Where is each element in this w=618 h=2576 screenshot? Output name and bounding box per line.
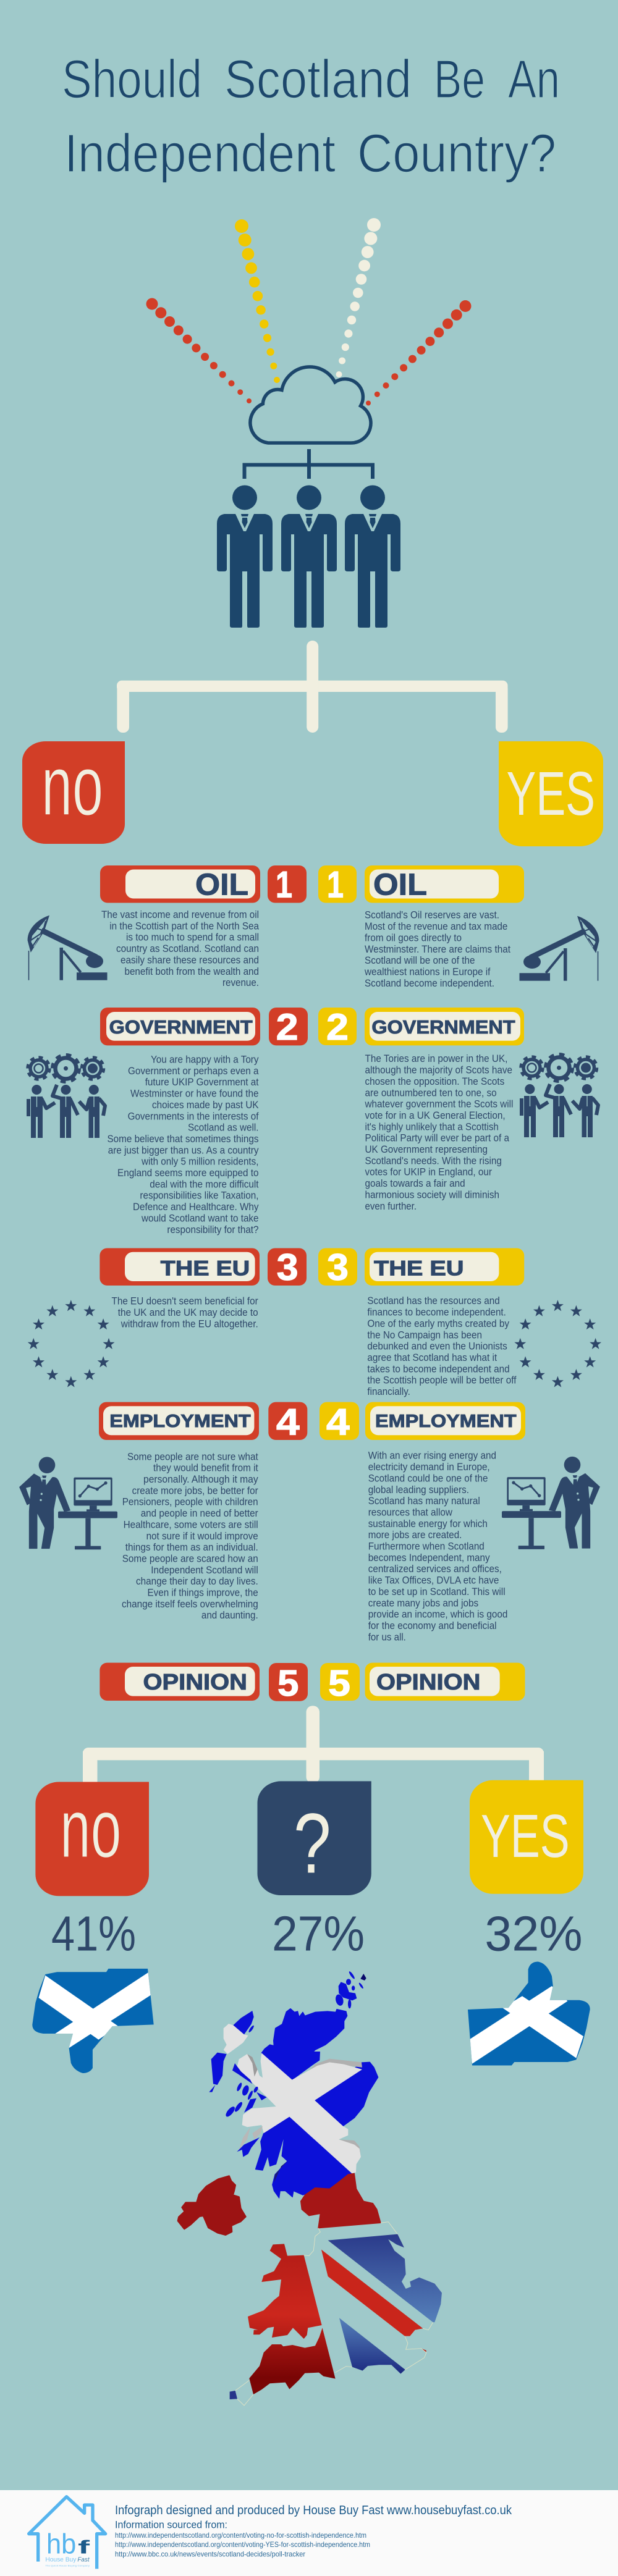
section 2 heading: government, yes side: GOVERNMENT [371, 1016, 515, 1038]
title: Country? [357, 124, 556, 183]
icon: people and gears right [520, 1054, 598, 1137]
text: EU, yes side: One of the early myths created by [367, 1318, 509, 1329]
text: employment, yes side: to be set up in Scotland. This will [368, 1586, 506, 1597]
panel: no [22, 738, 125, 844]
text: oil, yes side: wealthiest nations in Europe if [364, 966, 491, 977]
text: oil, no side: revenue. [222, 977, 259, 988]
text: employment, yes side: create many jobs and jobs [368, 1597, 478, 1609]
map: Scotland with saltire [209, 1971, 378, 2198]
section 5 heading: opinion, no side [99, 1663, 260, 1701]
text: government, no side: Westminster or have found the [130, 1088, 258, 1100]
number 1 yellow [318, 864, 357, 906]
panel: yes [499, 741, 603, 846]
icon: thumb down with Scottish flag [31, 1968, 154, 2074]
text: employment, no side: and daunting. [201, 1609, 258, 1621]
number 5 yellow: 5 [328, 1663, 350, 1704]
section 4 heading: employment, no side: EMPLOYMENT [109, 1412, 251, 1431]
section 5 heading: opinion, yes side: OPINION [376, 1669, 480, 1694]
text: oil, yes side: Scotland's Oil reserves are vast. [365, 909, 499, 921]
dotted rays: red left [146, 298, 252, 403]
panel: opinion yes [470, 1780, 583, 1894]
text: employment, no side: change itself feels overwhelming [122, 1598, 258, 1610]
text: government, no side: Some believe that sometimes things [108, 1133, 258, 1145]
footer sources heading: Information sourced from: [115, 2519, 227, 2531]
text: employment, yes side: more jobs are created. [368, 1529, 462, 1541]
footer credit: Infograph designed and produced by House Buy Fast www.housebuyfast.co.uk [115, 2504, 512, 2517]
text: oil, no side: country as Scotland. Scotland can [116, 943, 259, 954]
number 3 red [268, 1247, 307, 1288]
icon: people and gears left [27, 1055, 105, 1138]
text: government, no side: You are happy with a Tory [151, 1054, 259, 1065]
text: EU, yes side: Scotland has the resources and [367, 1295, 500, 1307]
footer source links: http://www.independentscotland.org/content/voting-no-for-scottish-independence.htm [115, 2531, 366, 2540]
text: oil, yes side: from oil goes directly to [365, 932, 462, 943]
panel: opinion no [35, 1782, 149, 1896]
section 1 heading: oil, yes side: OIL [373, 869, 427, 902]
icon: man at desk left [20, 1457, 117, 1549]
text: EU, no side [111, 1295, 258, 1329]
number 2 yellow: 2 [326, 1006, 349, 1048]
number 1 yellow: 1 [327, 864, 344, 906]
text: EU, yes side: the No Campaign has been [367, 1329, 482, 1341]
text: employment, yes side: like Tax Offices, DVLA etc have [368, 1575, 499, 1586]
text: employment, no side: not sure if it would improve [146, 1530, 258, 1542]
text: government, yes side: harmonious society will diminish [365, 1189, 499, 1200]
text: government, yes side: chosen the opposition. The Scots [365, 1075, 504, 1087]
section 3 heading: the EU, yes side [365, 1248, 524, 1286]
logo: House Buy Fast: House Buy [45, 2557, 76, 2564]
text: government, yes side: Political Party will ever be part of a [365, 1132, 509, 1144]
title: Should [62, 49, 202, 109]
text: employment, yes side [368, 1450, 507, 1643]
text: oil, no side: benefit both from the wealth and [125, 966, 259, 977]
logo: House Buy Fast: hb [46, 2528, 76, 2559]
percentage: no 41%: 41% [51, 1906, 136, 1961]
text: oil, no side [101, 909, 259, 988]
text: government, yes side: UK Government representing [365, 1143, 488, 1155]
text: employment, yes side: global leading suppliers. [368, 1484, 469, 1496]
number 4 yellow: 4 [326, 1401, 350, 1442]
number 2 red: 2 [276, 1006, 298, 1048]
text: employment, yes side: sustainable energy for which [368, 1518, 488, 1530]
section 2 heading: government, no side: GOVERNMENT [109, 1016, 253, 1038]
section 2 heading: government, yes side [365, 1008, 524, 1045]
dotted rays: cream [336, 218, 381, 377]
section 4 heading: employment, yes side [365, 1402, 525, 1440]
number 3 yellow [318, 1247, 357, 1288]
title [62, 49, 560, 183]
text: employment, yes side: With an ever rising energy and [368, 1450, 496, 1462]
number 4 red: 4 [276, 1401, 300, 1442]
text: employment, yes side: for us all. [368, 1631, 406, 1643]
text: EU, yes side: debunked and even the Unionists [367, 1341, 507, 1352]
title: Be [434, 49, 485, 109]
text: government, no side: Defence and Healthcare. Why [133, 1201, 259, 1213]
text: employment, no side: personally. Although it may [143, 1473, 258, 1485]
text: government, yes side: although the majority of Scots have [365, 1064, 512, 1076]
section 3 heading: the EU, no side: THE EU [161, 1256, 250, 1280]
section 1 heading: oil, no side: OIL [195, 869, 248, 902]
text: oil, no side: The vast income and revenue from oil [101, 909, 259, 920]
text: EU, no side: The EU doesn't seem beneficial for [111, 1295, 258, 1307]
text: government, yes side: Scotland's needs. With the rising [365, 1155, 502, 1166]
panel: no: no [41, 738, 103, 833]
footer panel [0, 2490, 618, 2576]
percentage: yes 32%: 32% [485, 1906, 583, 1961]
text: employment, no side [122, 1450, 258, 1621]
text: government, yes side [365, 1053, 513, 1212]
text: government, no side: responsibility for that? [167, 1224, 258, 1235]
text: oil, yes side: Scotland become independent. [365, 977, 494, 989]
dotted rays: yellow [235, 219, 280, 383]
icon: oil pump left [28, 915, 107, 980]
text: employment, yes side: Scotland has many natural [368, 1495, 480, 1507]
tree connector: opinion [83, 1706, 544, 1785]
text: government, no side: Government or perhaps even a [128, 1065, 259, 1077]
number 5 yellow [320, 1663, 360, 1704]
section 1 heading: oil, no side [100, 865, 260, 903]
section 3 heading: the EU, yes side: THE EU [374, 1256, 464, 1280]
number 5 red: 5 [277, 1663, 298, 1704]
text: government, yes side: even further. [365, 1200, 417, 1212]
icon: three business people [217, 486, 400, 628]
text: employment, no side: Pensioners, people with children [122, 1496, 258, 1508]
text: employment, no side: Some people are scared how an [122, 1553, 258, 1564]
text: government, no side: England seems more equipped to [117, 1167, 258, 1179]
text: EU, yes side: finances to become independent. [367, 1307, 506, 1318]
icon: thumb up with Scottish flag [467, 1961, 591, 2066]
connector: cloud to people [245, 449, 373, 479]
section 5 heading: opinion, no side: OPINION [143, 1669, 247, 1694]
number 1 red: 1 [276, 864, 292, 906]
icon: cloud [250, 367, 371, 443]
section 5 heading: opinion, yes side [365, 1663, 525, 1701]
text: oil, no side: in the Scottish part of the North Sea [109, 920, 259, 932]
text: EU, yes side [367, 1295, 517, 1397]
text: EU, yes side: financially. [367, 1386, 410, 1397]
title: An [508, 49, 560, 109]
text: government, no side: future UKIP Government at [145, 1076, 259, 1088]
text: employment, yes side: resources that allow [368, 1506, 453, 1518]
text: government, no side: are just bigger than us. As a country [108, 1144, 259, 1156]
number 3 red: 3 [277, 1247, 298, 1288]
text: government, no side [108, 1054, 259, 1235]
text: government, yes side: vote for in a UK General Election, [365, 1109, 506, 1121]
footer source links [115, 2531, 370, 2559]
map: United Kingdom in flag colours [178, 1971, 442, 2406]
dotted rays: red right [366, 300, 471, 405]
section 3 heading: the EU, no side [99, 1248, 260, 1286]
title: Scotland [224, 49, 412, 109]
text: government, no side: would Scotland want to take [141, 1212, 258, 1224]
map: Ireland, England and Wales [178, 2173, 442, 2406]
text: employment, yes side: centralized services and offices, [368, 1563, 502, 1575]
text: employment, no side: change their day to day lives. [136, 1575, 258, 1587]
text: employment, no side: Even if things improve, the [147, 1586, 258, 1599]
panel: opinion yes: YES [481, 1802, 570, 1870]
text: oil, yes side: Most of the revenue and tax made [365, 920, 507, 932]
text: government, yes side: The Tories are in power in the UK, [365, 1053, 507, 1064]
text: government, yes side: goals towards a fair and [365, 1177, 465, 1189]
text: government, no side: responsibilities like Taxation, [140, 1190, 258, 1202]
footer source links: http://www.bbc.co.uk/news/events/scotland-decides/poll-tracker [115, 2550, 305, 2559]
text: employment, no side: Some people are not sure what [127, 1450, 258, 1462]
text: EU, yes side: agree that Scotland has what it [367, 1352, 497, 1363]
panel: opinion no: no [60, 1782, 121, 1875]
text: EU, no side: withdraw from the EU altogether. [121, 1318, 258, 1329]
text: oil, yes side: Westminster. There are claims that [365, 943, 510, 955]
icon: oil pump right [519, 916, 599, 981]
panel: opinion undecided: ? [294, 1796, 331, 1892]
logo: House Buy Fast [29, 2497, 106, 2569]
number 4 red [268, 1401, 307, 1442]
number 5 red [269, 1663, 308, 1704]
text: employment, yes side: electricity demand in Europe, [368, 1461, 490, 1473]
text: oil, no side: is too much to spend for a small [126, 932, 259, 943]
panel: opinion undecided [257, 1781, 371, 1895]
text: employment, yes side: for the economy and beneficial [368, 1620, 497, 1631]
number 2 red [269, 1006, 308, 1048]
text: employment, no side: and people in need of better [141, 1507, 258, 1519]
section 4 heading: employment, no side [99, 1402, 259, 1440]
number 4 yellow [320, 1401, 359, 1442]
logo: House Buy Fast: The Quick House Buying Company [45, 2565, 90, 2567]
text: employment, yes side: becomes Independent, many [368, 1552, 490, 1564]
logo: House Buy Fast: Fast [77, 2557, 90, 2564]
logo: House Buy Fast: f [78, 2536, 90, 2557]
percentage: undecided 27%: 27% [272, 1906, 365, 1961]
number 1 red [268, 864, 307, 906]
text: EU, yes side: takes to become independent and [367, 1363, 510, 1374]
icon: EU stars right [514, 1300, 601, 1387]
text: employment, no side: create more jobs, be better for [132, 1484, 258, 1496]
tree connector: no and yes [117, 641, 508, 733]
text: government, yes side: it's highly unlikely that a Scottish [365, 1121, 499, 1132]
text: employment, no side: Independent Scotland will [151, 1564, 258, 1576]
icon: EU stars left [28, 1300, 115, 1387]
text: oil, yes side [364, 909, 510, 989]
text: oil, no side: easily share these resources and [121, 954, 259, 966]
text: government, no side: deal with the more difficult [150, 1178, 259, 1190]
text: government, no side: with only 5 million residents, [141, 1156, 258, 1168]
section 2 heading: government, no side [100, 1008, 260, 1045]
text: government, yes side: whatever government the Scots will [365, 1098, 513, 1110]
text: government, no side: choices made by past UK [152, 1099, 259, 1111]
text: EU, no side: the UK and the UK may decide to [118, 1307, 258, 1318]
number 3 yellow: 3 [327, 1247, 349, 1288]
text: EU, yes side: the Scottish people will be better off [367, 1374, 517, 1386]
text: employment, no side: they would benefit from it [153, 1462, 258, 1474]
text: government, no side: Governments in the interests of [128, 1110, 259, 1122]
text: employment, no side: Healthcare, some voters are still [124, 1518, 258, 1530]
text: employment, yes side: Scotland could be one of the [368, 1472, 488, 1484]
text: government, yes side: votes for UKIP in England, our [365, 1166, 492, 1178]
text: oil, yes side: Scotland will be one of the [365, 954, 475, 966]
section 4 heading: employment, yes side: EMPLOYMENT [375, 1412, 517, 1431]
text: employment, yes side: provide an income, which is good [368, 1609, 507, 1620]
title: Independent [64, 124, 336, 183]
text: employment, yes side: Furthermore when Scotland [368, 1541, 485, 1552]
section 1 heading: oil, yes side [365, 865, 524, 903]
icon: man at desk right [502, 1457, 599, 1549]
text: government, yes side: are outnumbered ten to one, so [365, 1087, 497, 1098]
number 2 yellow [318, 1006, 357, 1048]
text: government, no side: Scotland as well. [188, 1122, 258, 1134]
footer source links: http://www.independentscotland.org/content/voting-YES-for-scottish-independence.htm [115, 2540, 370, 2549]
text: employment, no side: things for them as an individual. [125, 1541, 258, 1553]
